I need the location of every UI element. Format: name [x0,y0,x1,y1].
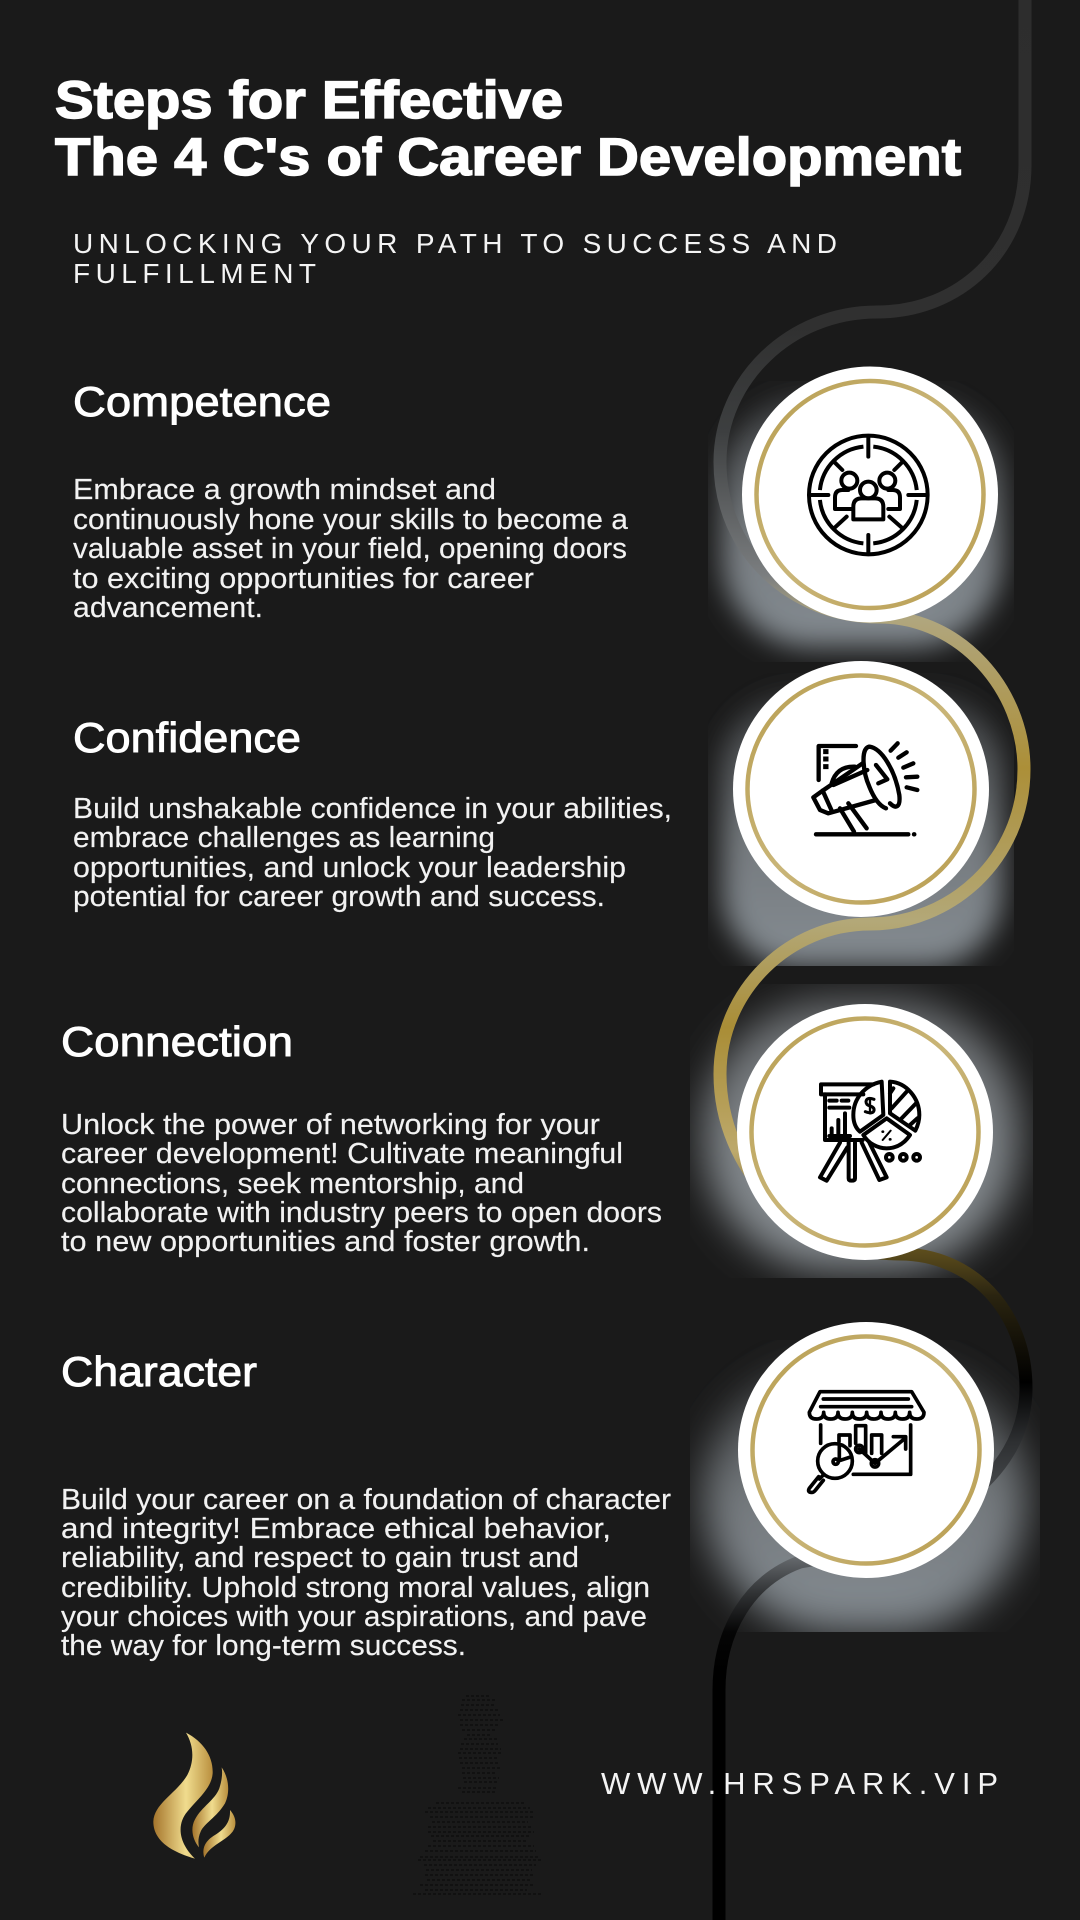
glow: behind character circle [704,1360,1026,1632]
text: confidence description [73,793,672,913]
text: competence description: continuously hone your skills to become a [73,504,629,536]
icon: storefront with analytics [809,1392,924,1492]
website url: WWW.HRSPARK.VIP [601,1766,998,1801]
heading: confidence: Confidence [73,714,301,761]
text: character description: and integrity! Embrace ethical behavior, [61,1513,611,1545]
panel: connection [61,1018,662,1258]
text: connection description: Unlock the power of networking for your [61,1109,600,1141]
icon: megaphone [813,743,917,834]
panel: character [61,1348,671,1662]
text: connection description: career development! Cultivate meaningful [61,1138,623,1170]
faint silhouette [413,1696,543,1894]
heading: competence: Competence [73,378,331,425]
icon: team in target [809,436,928,554]
subtitle [73,228,837,289]
icon: presentation board with pie chart [820,1082,920,1181]
text: character description [61,1484,671,1662]
text: competence description: advancement. [73,592,263,624]
text: character description: reliability, and respect to gain trust and [61,1542,579,1574]
text: confidence description: potential for career growth and success. [73,881,605,913]
glow: behind connection circle [704,1000,1018,1270]
badge: connection circle [737,1004,993,1260]
text: confidence description: embrace challenges as learning [73,822,495,854]
text: competence description [73,474,629,624]
text: connection description: collaborate with industry peers to open doors [61,1197,662,1229]
text: competence description: to exciting opportunities for career [73,563,534,595]
subtitle: UNLOCKING YOUR PATH TO SUCCESS AND [73,228,837,259]
heading: connection: Connection [61,1018,293,1065]
text: connection description [61,1109,662,1258]
panel: confidence [73,714,672,913]
text: character description: the way for long-term success. [61,1630,466,1662]
text: character description: your choices with your aspirations, and pave [61,1601,647,1633]
heading: character: Character [61,1348,257,1395]
text: confidence description: opportunities, and unlock your leadership [73,852,626,884]
badge: competence circle [742,366,998,622]
badge: character circle [738,1322,994,1578]
text: competence description: Embrace a growth mindset and [73,474,496,506]
title: The 4 C's of Career Development [55,128,961,187]
logo: golden flame [153,1733,235,1859]
winding ribbon path [719,0,1026,1920]
panel: competence [73,378,629,624]
text: competence description: valuable asset in your field, opening doors [73,533,627,565]
text: connection description: connections, seek mentorship, and [61,1168,524,1200]
text: confidence description: Build unshakable confidence in your abilities, [73,793,672,825]
text: connection description: to new opportunities and foster growth. [61,1226,590,1258]
text: character description: Build your career on a foundation of character [61,1484,671,1516]
text: character description: credibility. Uphold strong moral values, align [61,1572,650,1604]
glow: behind confidence circle [722,695,1002,967]
subtitle: FULFILLMENT [73,258,316,289]
badge: confidence circle [733,661,989,917]
title [55,71,961,187]
glow: behind competence circle [722,395,1002,647]
title: Steps for Effective [55,71,563,130]
